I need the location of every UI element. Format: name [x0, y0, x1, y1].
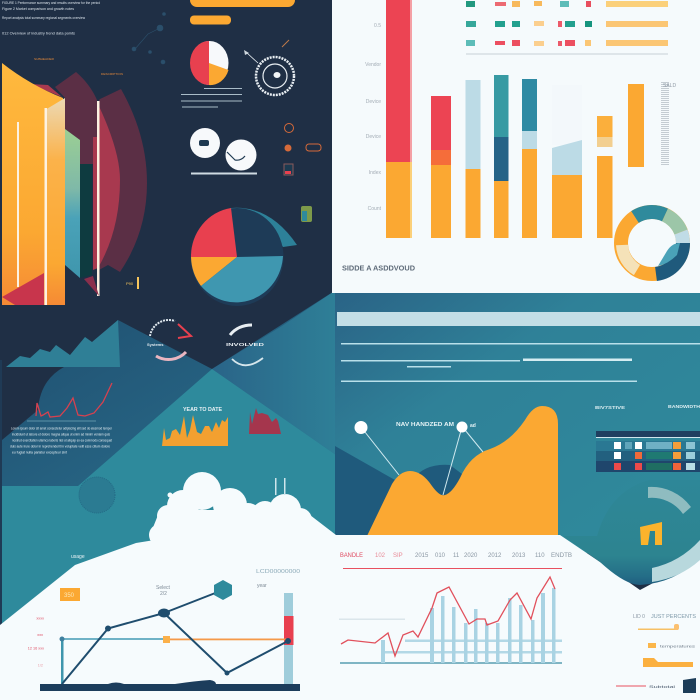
red line [341, 577, 555, 656]
x label row: ENDTB [551, 553, 572, 559]
paragraph: duis aute irure dolor in reprehenderit in voluptate velit esse cillum dolore [10, 444, 110, 448]
3D layered chart [2, 63, 147, 305]
amber badge [60, 588, 80, 601]
axis labels: Vendor [365, 62, 381, 68]
navy square [683, 678, 696, 693]
callout pins [354, 421, 483, 495]
y labels: 1/2 [38, 664, 43, 668]
axis labels: Count [368, 206, 382, 212]
table headings: BIV7STIVE [595, 405, 625, 410]
axis labels: Index [369, 170, 381, 176]
area chart label: NAV HANDZED AM [396, 422, 454, 428]
nodes [60, 608, 291, 676]
amber slider [638, 624, 679, 630]
green blue panel [65, 129, 80, 278]
teal horizontal line [62, 638, 167, 640]
x label row: SIP [393, 553, 403, 559]
amber left face [2, 63, 63, 305]
teal arc accent [231, 208, 297, 247]
small white label: usage [71, 554, 85, 560]
top text block: 012 Overview of industry trend data points [2, 32, 75, 36]
combo chart panel [339, 553, 572, 664]
paragraph: Lorem ipsum dolor sit amet consectetur adipiscing elit sed do eiusmod tempor [11, 426, 113, 430]
dark background panel [0, 0, 336, 700]
red rule [343, 568, 562, 569]
area chart label [396, 422, 476, 429]
cycle diagram left [147, 320, 191, 360]
top text block: Figure 2 Market comparison and growth notes [2, 7, 74, 11]
red sliver [30, 84, 62, 97]
amber tab [643, 658, 693, 667]
axis labels: 0.5 [374, 23, 381, 29]
paragraph [10, 426, 113, 454]
chart labels: LCD00000000 [256, 569, 300, 575]
small chart tag [126, 277, 139, 289]
scale ticks: SALD [663, 83, 676, 89]
large pie chart [190, 208, 297, 306]
table headings [595, 404, 700, 410]
bar 4 [494, 75, 508, 238]
target rings icon [244, 40, 294, 95]
cycle diagram right [226, 325, 265, 365]
axis labels: Device [366, 134, 381, 140]
blue diagonal band [2, 290, 336, 486]
navy polyline [62, 590, 288, 684]
chart labels: Select [156, 585, 171, 591]
y labels: xxxx [36, 616, 44, 620]
panel: white bar chart area [332, 0, 700, 293]
y labels: xxx [37, 633, 43, 637]
maroon foot [84, 276, 99, 296]
legend bottom right: LID 0 [633, 614, 645, 620]
teal circle with ring [563, 480, 700, 585]
pie caption lines [181, 88, 242, 108]
y labels [28, 616, 44, 668]
dark teal panel [80, 164, 92, 278]
axis labels: Device [366, 99, 381, 105]
blue upper right wedge [212, 290, 336, 455]
bar 3 [466, 80, 480, 238]
red arc [93, 102, 120, 270]
dark hill [335, 446, 470, 535]
orange pill small [190, 16, 231, 24]
pale amber face [45, 98, 65, 305]
x label row: 110 [535, 553, 545, 559]
top text block: FIGURE 1 Performance summary and results overview for the period [2, 1, 100, 5]
cycle diagram right: INVOLVED [226, 342, 265, 347]
scale ticks [663, 82, 676, 166]
amber swatch: temperatures [660, 644, 695, 648]
x label row: 2012 [488, 553, 502, 559]
amber badge: 350 [64, 593, 75, 599]
two white circles icon [190, 128, 257, 174]
red bottom triangle [2, 273, 44, 305]
icon: green tag [301, 206, 312, 222]
icon: amber tag [640, 522, 662, 545]
bar 8 [628, 84, 644, 167]
grid rows [340, 640, 562, 664]
maroon outer arc [99, 89, 147, 272]
sparkline rule [27, 420, 96, 422]
chart labels [156, 569, 300, 597]
mountain chart [6, 320, 120, 367]
paragraph: nostrud exercitation ullamco laboris nisi ut aliquip ex ea commodo consequat [12, 438, 112, 442]
pale rule [339, 618, 405, 620]
teal triangle field [0, 369, 336, 640]
line chart panel [28, 569, 300, 691]
red mini bars [249, 408, 281, 434]
bar 2 [431, 96, 451, 238]
axis bar [40, 680, 300, 691]
amber mini bars [162, 415, 228, 446]
legend table [466, 1, 668, 54]
x label row: 010 [435, 553, 446, 559]
light column [284, 593, 293, 684]
white posts [17, 101, 100, 305]
red sparkline [36, 383, 112, 417]
small amber labels: SUBHEADER [34, 57, 54, 61]
small chart tag: P90 [126, 281, 134, 286]
small orange icons [284, 124, 321, 175]
x label row: 11 [453, 553, 460, 559]
data table [596, 431, 700, 472]
bar 6 [552, 85, 582, 238]
chart caption: SIDDE A ASDDVOUD [342, 264, 416, 272]
small pie chart [190, 41, 228, 85]
legend bottom right [616, 614, 697, 693]
x label row: BANDLE [340, 553, 363, 559]
chart labels: year [257, 583, 267, 589]
x label row: 102 [375, 553, 386, 559]
top text block: Report analysis total summary regional segments overview [2, 16, 85, 20]
small amber labels [34, 57, 123, 76]
y labels: 12 16 xxx [28, 646, 44, 650]
columns [381, 588, 556, 663]
paragraph: eu fugiat nulla pariatur excepteur sint [12, 450, 67, 454]
stippled globe [79, 477, 115, 513]
x label row: 2020 [464, 553, 478, 559]
x label row: 2013 [512, 553, 526, 559]
cloud and lower white field [0, 472, 700, 700]
hexagon marker [214, 580, 232, 600]
red rule and label: Subtotal [649, 684, 675, 689]
table headings: BANDWIDTH [668, 404, 700, 409]
axis labels [365, 23, 382, 212]
maroon inner shape [55, 72, 97, 164]
top text block [2, 1, 100, 36]
left dark edge strip [0, 360, 2, 625]
red column segment [284, 616, 294, 645]
text lines [341, 343, 700, 382]
legend bottom right: JUST PERCENTS [651, 614, 697, 620]
ring segments [648, 487, 691, 514]
bar 7 [597, 116, 612, 238]
bar 1 [386, 0, 412, 238]
x label row: 2015 [415, 553, 429, 559]
faint scatter constellation [132, 12, 166, 64]
bar 5 [522, 79, 537, 238]
panel: teal section [335, 293, 700, 553]
mini bars heading: YEAR TO DATE [183, 407, 223, 413]
teal vertical line [61, 639, 64, 684]
amber area chart [367, 406, 558, 536]
chart labels: 2/2 [160, 591, 167, 597]
cycle diagram left: Systems [147, 342, 164, 347]
header bar [337, 312, 700, 326]
donut chart [621, 212, 683, 274]
orange horizontal line [168, 638, 288, 640]
cloud posts [275, 478, 286, 495]
x label row [340, 553, 572, 559]
area chart label: ad [470, 423, 476, 429]
paragraph: incididunt ut labore et dolore magna aliqua ut enim ad minim veniam quis [12, 432, 110, 436]
orange pill top [190, 0, 295, 7]
small amber labels: DESCRIPTION [101, 72, 123, 76]
